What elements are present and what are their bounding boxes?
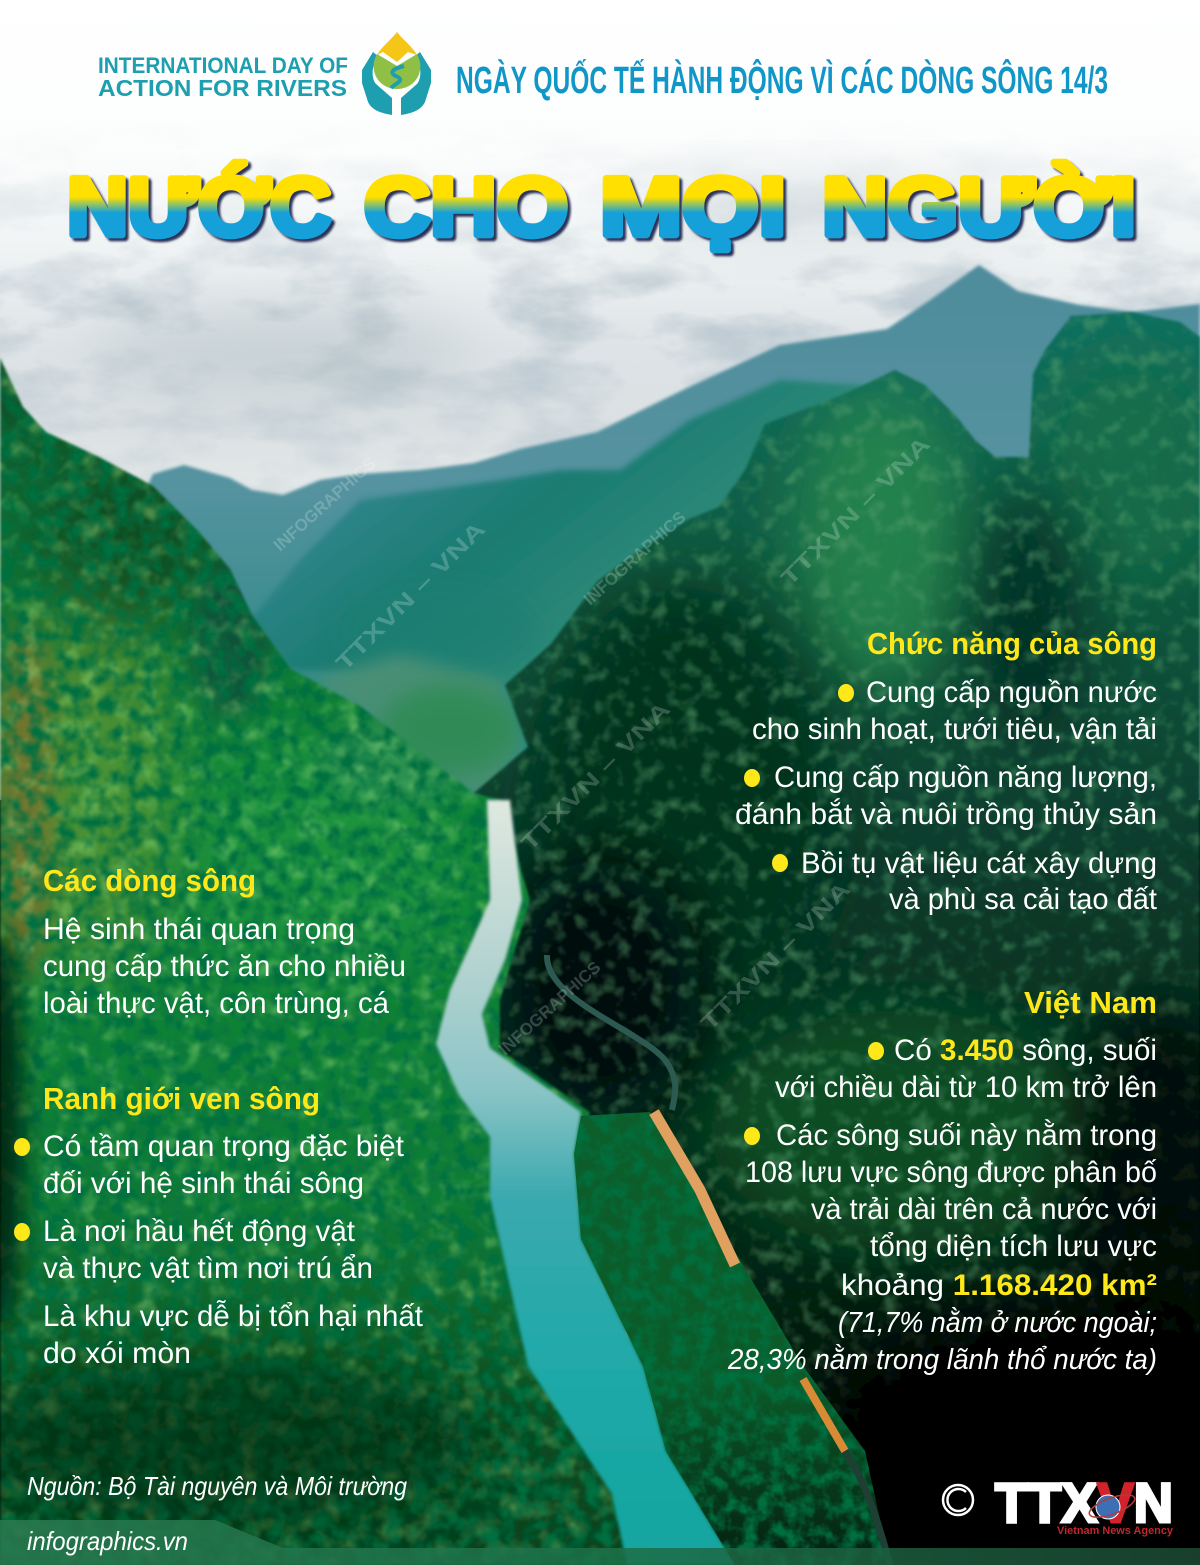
background: distant hazy mountains bbox=[0, 265, 1200, 800]
heading: functions: Chức năng của sông bbox=[867, 626, 1157, 661]
text block: rivers description: Hệ sinh thái quan trọng bbox=[43, 913, 355, 946]
icon: riparian bullets bbox=[14, 1138, 30, 1241]
text block: functions list: Cung cấp nguồn nước bbox=[866, 676, 1157, 709]
text block: Vietnam facts: 28,3% nằm trong lãnh thổ nước ta) bbox=[727, 1343, 1157, 1376]
logo: TTXVN: Vietnam News Agency bbox=[1057, 1525, 1174, 1537]
watermarks: TTXVN – VNA bbox=[331, 516, 490, 676]
icon: function bullets bbox=[744, 684, 854, 872]
background: sky and clouds bbox=[0, 0, 1200, 800]
text block: riparian facts bbox=[43, 1130, 424, 1370]
text block: functions list: đánh bắt và nuôi trồng thủy sản bbox=[735, 798, 1157, 831]
watermarks: INFOGRAPHICS bbox=[495, 958, 605, 1059]
text block: functions list: Bồi tụ vật liệu cát xây dựng bbox=[801, 847, 1157, 880]
icon: Vietnam bullets bbox=[744, 1042, 884, 1145]
text block: riparian facts: Là nơi hầu hết động vật bbox=[43, 1215, 356, 1248]
panel: Vietnam bbox=[727, 985, 1157, 1376]
title bbox=[67, 160, 1136, 253]
logo text: International Day of Action for Rivers bbox=[98, 53, 348, 101]
text block: Vietnam facts: Các sông suối này nằm trong bbox=[776, 1119, 1157, 1152]
title: MỌI bbox=[600, 160, 786, 253]
text block: riparian facts: Có tầm quan trọng đặc biệt bbox=[43, 1130, 405, 1163]
watermarks: TTXVN – VNA bbox=[776, 431, 935, 591]
text block: Vietnam facts: Có 3.450 sông, suối bbox=[894, 1034, 1157, 1067]
text block: Vietnam facts: tổng diện tích lưu vực bbox=[870, 1230, 1157, 1263]
heading: rivers: Các dòng sông bbox=[43, 863, 256, 898]
text block: rivers description: loài thực vật, côn trùng, cá bbox=[43, 987, 389, 1020]
panel: rivers bbox=[43, 863, 406, 1020]
text block: Vietnam facts: với chiều dài từ 10 km trở lên bbox=[775, 1071, 1157, 1104]
watermarks: TTXVN – VNA bbox=[516, 696, 675, 856]
watermarks: INFOGRAPHICS bbox=[270, 454, 380, 555]
icon: logo drop with hands and river bbox=[362, 32, 431, 115]
text block: riparian facts: đối với hệ sinh thái sông bbox=[43, 1167, 364, 1200]
logo: TTXVN: TTXVN bbox=[995, 1471, 1173, 1534]
panel: riparian zone bbox=[14, 1081, 424, 1370]
text block: Vietnam facts: và trải dài trên cả nước với bbox=[811, 1193, 1157, 1226]
text block: functions list: cho sinh hoạt, tưới tiêu, vận tải bbox=[752, 713, 1157, 746]
text block: Vietnam facts: khoảng 1.168.420 km² bbox=[841, 1269, 1157, 1302]
text block: functions list: và phù sa cải tạo đất bbox=[889, 883, 1158, 916]
background: valley floor bbox=[310, 655, 520, 805]
watermarks bbox=[270, 431, 935, 1059]
title: CHO bbox=[364, 160, 568, 253]
text block: rivers description bbox=[43, 913, 406, 1020]
background: forested island beside the river bbox=[570, 1110, 895, 1565]
text block: riparian facts: do xói mòn bbox=[43, 1337, 191, 1370]
background: road along the river bbox=[547, 955, 890, 1565]
logo text: International Day of Action for Rivers: ACTION FOR RIVERS bbox=[98, 75, 347, 101]
background: middle teal mountains bbox=[250, 380, 900, 685]
text block: functions list: Cung cấp nguồn năng lượng, bbox=[774, 761, 1157, 794]
website: infographics.vn bbox=[27, 1526, 188, 1556]
source: Nguồn: Bộ Tài nguyên và Môi trường bbox=[27, 1471, 407, 1501]
title: NƯỚC bbox=[67, 160, 331, 253]
text block: riparian facts: Là khu vực dễ bị tổn hại nhất bbox=[43, 1300, 424, 1333]
background: left forested mountain bbox=[0, 350, 760, 1565]
icon: copyright bbox=[943, 1485, 973, 1515]
panel: river functions bbox=[735, 626, 1158, 916]
bottom band bbox=[0, 1520, 1200, 1565]
background: right mountains bbox=[474, 310, 1200, 1422]
logo text: International Day of Action for Rivers: INTERNATIONAL DAY OF bbox=[98, 53, 348, 78]
text block: riparian facts: và thực vật tìm nơi trú ẩn bbox=[43, 1252, 373, 1285]
text block: Vietnam facts: 108 lưu vực sông được phân bố bbox=[745, 1156, 1157, 1189]
text block: rivers description: cung cấp thức ăn cho nhiều bbox=[43, 950, 406, 983]
text block: Vietnam facts: (71,7% nằm ở nước ngoài; bbox=[838, 1306, 1157, 1339]
text block: functions list bbox=[735, 676, 1158, 916]
background: river bbox=[436, 800, 735, 1565]
title: NGƯỜI bbox=[822, 160, 1136, 253]
watermarks: INFOGRAPHICS bbox=[580, 508, 690, 609]
heading: Vietnam: Việt Nam bbox=[1024, 985, 1157, 1020]
watermarks: TTXVN – VNA bbox=[696, 876, 855, 1036]
text block: Vietnam facts bbox=[727, 1034, 1157, 1376]
heading: riparian zone: Ranh giới ven sông bbox=[43, 1081, 320, 1116]
